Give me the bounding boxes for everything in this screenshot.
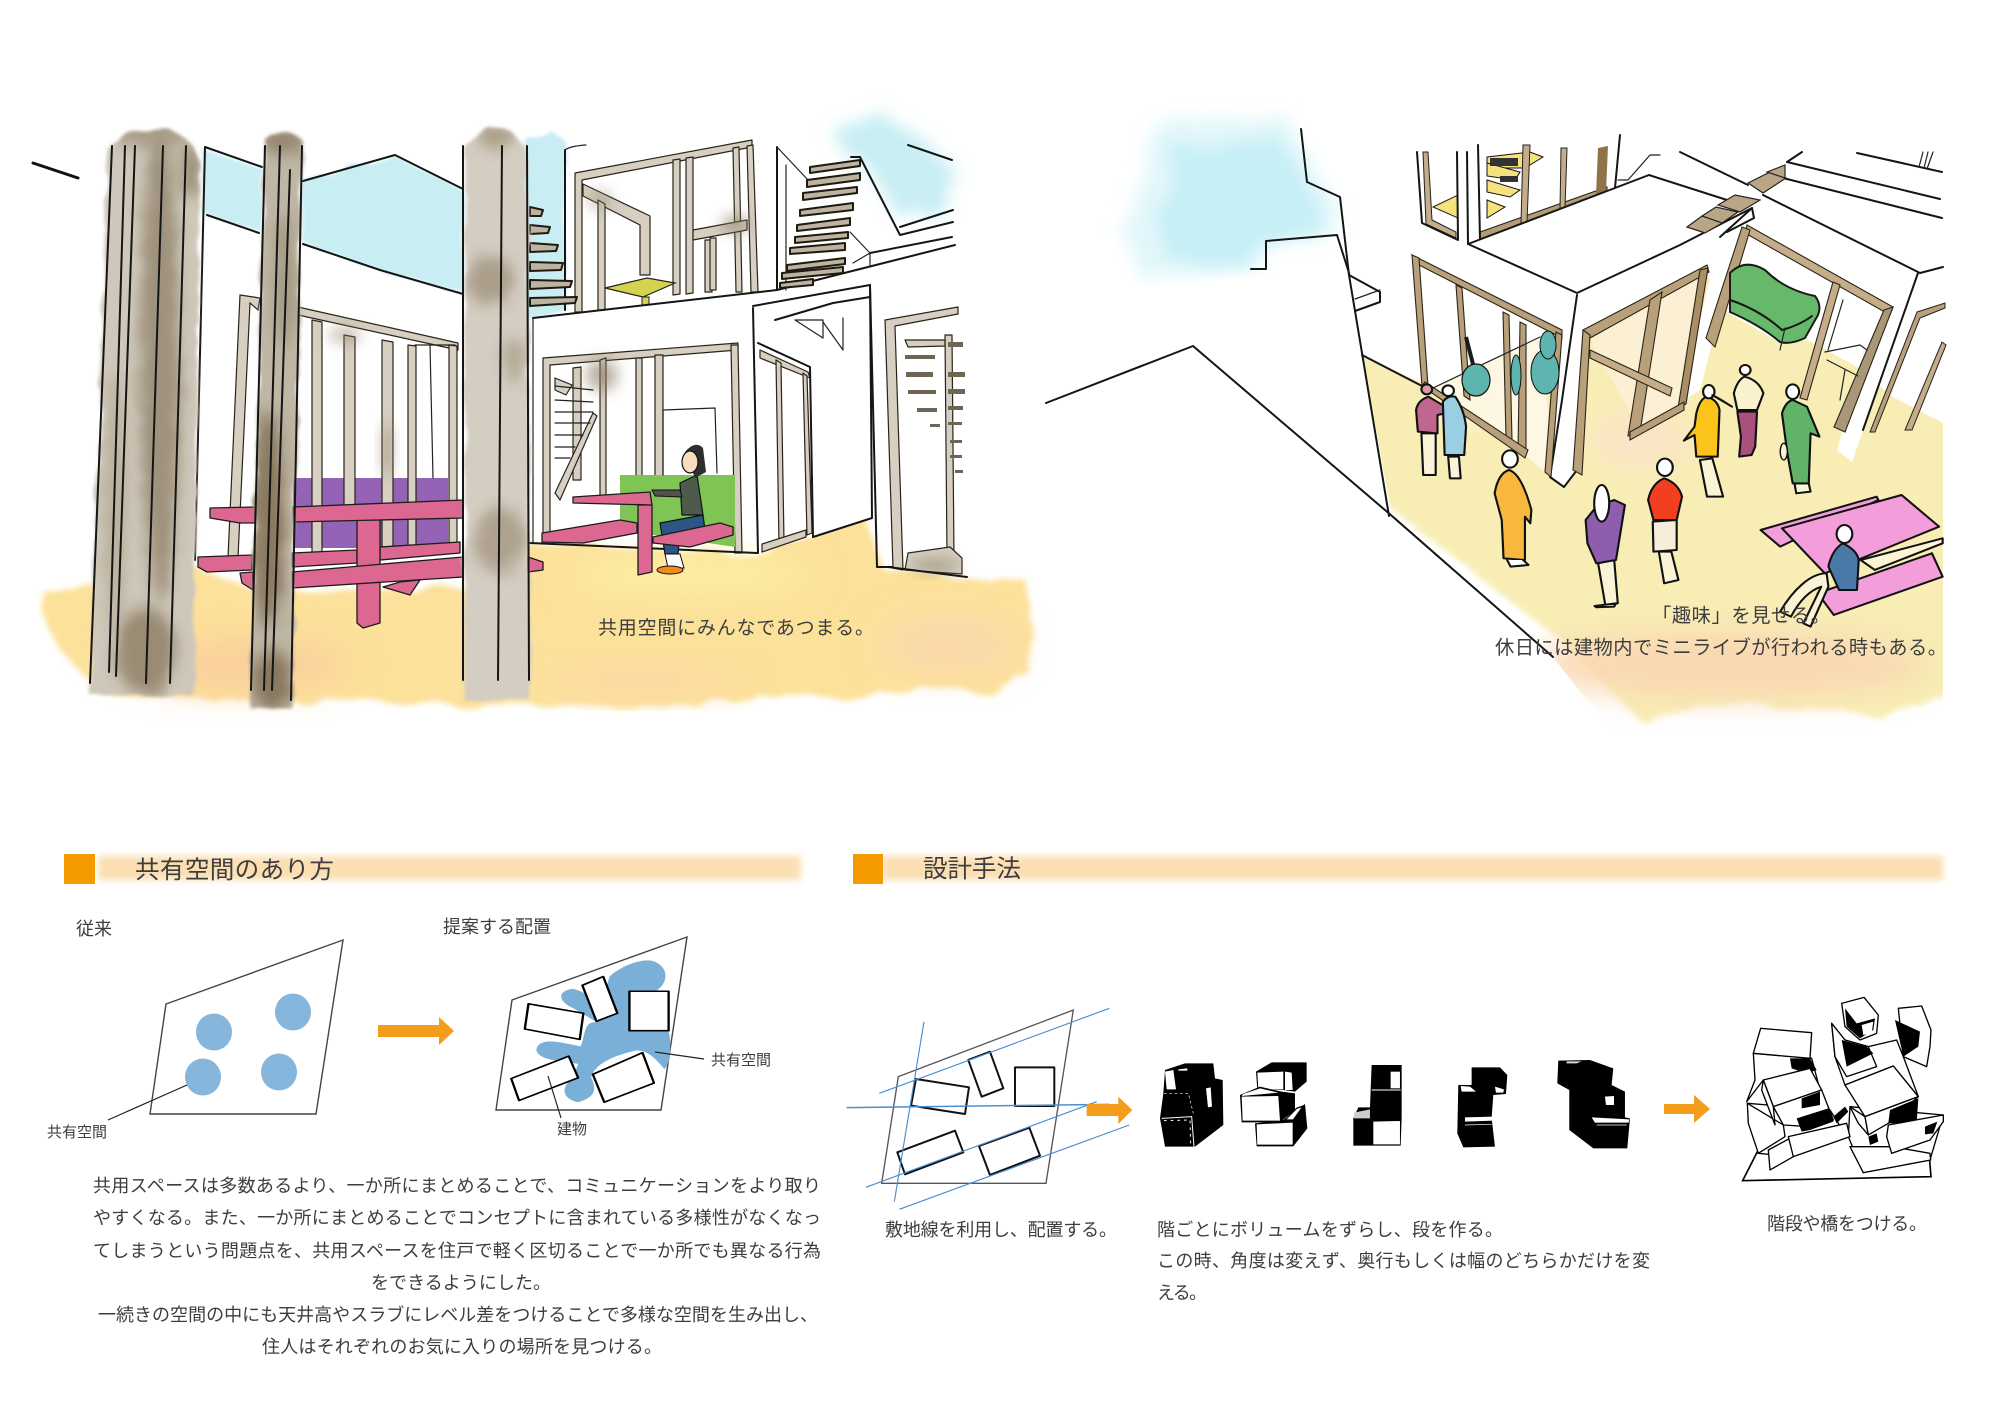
caption: stepped volumes: この時、角度は変えず、奥行もしくは幅のどちらかだけを変 xyxy=(1157,1251,1650,1271)
paragraph: shared space description: 一続きの空間の中にも天井高やスラブにレベル差をつけることで多様な空間を生み出し、 xyxy=(98,1304,818,1325)
pink picnic table, left xyxy=(198,500,543,628)
arrow: to volumes xyxy=(1087,1097,1132,1124)
volume 5 xyxy=(1557,1060,1630,1148)
floating stairs, upper right xyxy=(777,145,953,290)
caption: stepped volumes: える。 xyxy=(1157,1283,1207,1303)
diagram: conventional layout xyxy=(47,919,343,1141)
mid white block and door xyxy=(753,285,872,553)
buildings xyxy=(511,977,669,1102)
lower boxes xyxy=(1747,1103,1931,1173)
caption: left perspective: 共用空間にみんなであつまる。 xyxy=(598,617,874,639)
volume 2 xyxy=(1240,1062,1307,1146)
caption: final massing: 階段や橋をつける。 xyxy=(1767,1214,1927,1234)
shared space blob xyxy=(536,960,670,1102)
paragraph: shared space description: やすくなる。また、一か所にまとめることでコンセプトに含まれている多様性がなくなっ xyxy=(93,1208,821,1228)
caption: stepped volumes: 階ごとにボリュームをずらし、段を作る。 xyxy=(1157,1220,1503,1240)
centre-left house xyxy=(1762,1068,1833,1132)
connecting walls behind the boxes xyxy=(1747,1023,1943,1173)
caption: right perspective: 「趣味」を見せる。 xyxy=(1652,605,1830,627)
section heading: 共有空間のあり方 xyxy=(64,854,801,884)
section heading: 設計手法: 設計手法 xyxy=(923,855,1021,883)
diagram: proposed layout xyxy=(443,917,771,1138)
right room with green sofa xyxy=(1706,225,1946,432)
centre sliding window xyxy=(1573,265,1709,475)
leader line and label: 共有空間 xyxy=(47,1124,107,1141)
shared space circles xyxy=(185,994,311,1096)
section heading: 設計手法 xyxy=(853,854,1943,884)
right block with upper window xyxy=(533,140,955,318)
building line work, site edge xyxy=(1046,129,1553,657)
person: red top xyxy=(1648,459,1682,583)
people group xyxy=(1416,365,1943,627)
diagram: stepped volumes xyxy=(1160,1060,1630,1148)
label: 提案する配置: 提案する配置 xyxy=(443,917,551,937)
column 3 xyxy=(460,120,532,705)
paragraph: shared space description: 住人はそれぞれのお気に入りの場所を見つける。 xyxy=(262,1337,662,1357)
site outline xyxy=(496,937,687,1110)
leader and label: 建物 xyxy=(548,1076,587,1138)
leader line and label xyxy=(47,1085,187,1141)
base plane xyxy=(1743,1123,1931,1181)
sky wash xyxy=(1118,116,1334,280)
person: orange dress xyxy=(1495,450,1531,567)
caption: site lines: 敷地線を利用し、配置する。 xyxy=(885,1220,1117,1240)
floating stairs, left xyxy=(530,207,577,306)
caption: right perspective xyxy=(1495,605,1947,659)
sky upper right xyxy=(827,120,957,223)
person: pink top xyxy=(1416,384,1454,475)
picnic table, pink xyxy=(1761,495,1943,615)
roof slab and walls xyxy=(1412,155,1918,487)
upper window with shelves xyxy=(1417,135,1620,244)
caption: right perspective: 休日には建物内でミニライブが行われる時もある。 xyxy=(1495,636,1947,659)
volume 1 xyxy=(1160,1063,1223,1147)
section heading: 共有空間のあり方: 共有空間のあり方 xyxy=(135,856,334,884)
pink table and benches with seated person xyxy=(542,445,733,575)
drum kit xyxy=(1511,331,1559,395)
arrow: to final massing xyxy=(1664,1095,1710,1123)
diagram: final massing with stairs and bridges xyxy=(1743,997,1943,1181)
column 1 xyxy=(87,126,203,700)
volume 4 xyxy=(1457,1067,1507,1147)
tower boxes xyxy=(1753,997,1931,1077)
short roof stroke xyxy=(33,163,78,178)
person: yellow top xyxy=(1684,385,1732,497)
sky patches xyxy=(203,130,565,320)
paragraph: shared space description: をできるようにした。 xyxy=(371,1273,551,1293)
leader and label: 建物: 建物 xyxy=(557,1121,587,1138)
caption: stepped volumes xyxy=(1157,1220,1650,1303)
person: cap and magenta trousers xyxy=(1734,365,1763,457)
upper roof and bridge stairs xyxy=(1680,152,1942,273)
panel: perspective sketch, people in the shared space xyxy=(1046,116,1960,720)
arrow: conventional to proposed xyxy=(378,1017,454,1045)
person: blue dress xyxy=(1442,385,1466,478)
diagram: site lines placement xyxy=(847,1008,1132,1209)
front right house xyxy=(1845,1066,1943,1153)
left sliding window with instruments xyxy=(1412,255,1562,477)
site outline xyxy=(150,940,343,1114)
back room with purple wall and frames xyxy=(195,147,463,560)
guitar xyxy=(1462,337,1490,396)
leader and label: 共有空間 xyxy=(655,1052,771,1069)
far right door with stair treads xyxy=(870,285,967,577)
paragraph: shared space description: てしまうという問題点を、共用スペースを住戸で軽く区切ることで一か所でも異なる行為 xyxy=(93,1241,821,1261)
panel: perspective sketch, shared space xyxy=(33,120,1030,715)
bridge xyxy=(1833,1107,1848,1123)
person: purple top with long hair xyxy=(1586,485,1625,607)
paragraph: shared space description: 共用スペースは多数あるより、一か所にまとめることで、コミュニケーションをより取り xyxy=(93,1176,821,1196)
person: green dress with bag xyxy=(1780,384,1819,493)
sofa xyxy=(1730,265,1819,350)
site outline xyxy=(882,1010,1073,1183)
buildings xyxy=(897,1052,1054,1175)
guide lines xyxy=(847,1008,1129,1209)
white ground mass below sky xyxy=(1100,268,1392,516)
floor wash xyxy=(1364,275,1943,727)
leader and label: 共有空間: 共有空間 xyxy=(711,1052,771,1069)
lower window with stairs xyxy=(530,318,757,553)
label: 従来: 従来 xyxy=(76,919,112,939)
volume 3 xyxy=(1353,1065,1402,1146)
person: seated on bench xyxy=(1780,525,1859,627)
paragraph: shared space description xyxy=(93,1176,821,1357)
column 2 xyxy=(245,125,305,715)
floor wash xyxy=(42,518,1030,712)
seated person xyxy=(652,445,706,574)
